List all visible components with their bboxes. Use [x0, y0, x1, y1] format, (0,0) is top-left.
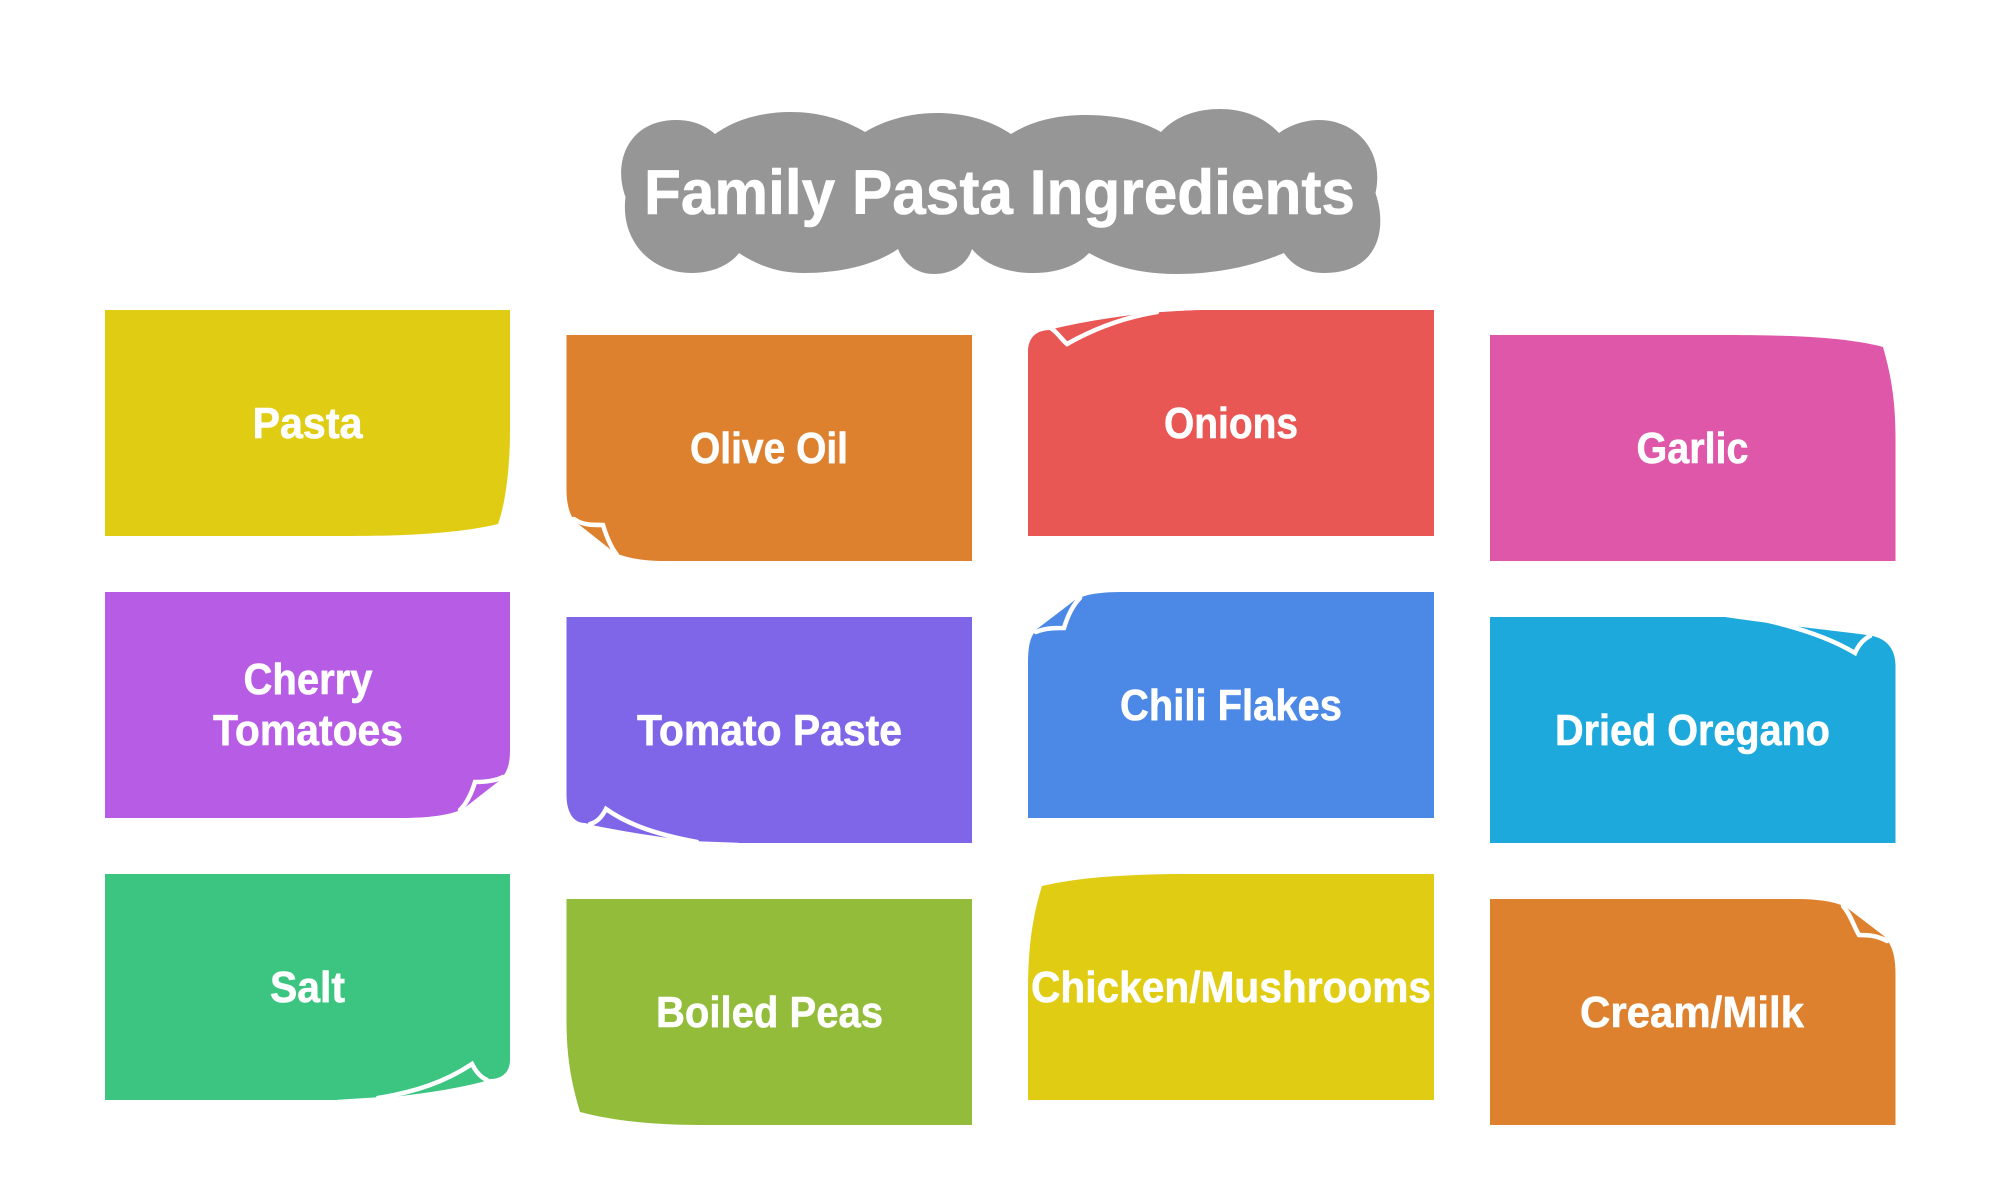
card: Cherry Tomatoes [105, 592, 510, 818]
title cloud banner: Family Pasta Ingredients [644, 158, 1355, 228]
card: Garlic: Garlic [1636, 424, 1748, 473]
card: Dried Oregano [1490, 616, 1896, 843]
card: Onions [1028, 308, 1434, 536]
card: Cream/Milk: Cream/Milk [1580, 988, 1804, 1037]
card: Onions: Onions [1164, 399, 1298, 448]
card: Chicken/Mushrooms [1028, 874, 1434, 1100]
card: Tomato Paste [566, 617, 972, 844]
card: Pasta: Pasta [252, 399, 363, 448]
card: Chili Flakes: Chili Flakes [1120, 681, 1342, 730]
card: Chili Flakes [1028, 592, 1434, 818]
card: Boiled Peas: Boiled Peas [656, 988, 883, 1037]
card: Cream/Milk [1490, 899, 1896, 1125]
card: Salt [105, 874, 510, 1101]
card: Tomato Paste: Tomato Paste [637, 706, 902, 755]
card: Olive Oil [566, 335, 972, 561]
card: Dried Oregano: Dried Oregano [1555, 706, 1830, 755]
title cloud banner [621, 109, 1380, 274]
card: Boiled Peas [566, 899, 972, 1125]
card: Cherry Tomatoes: Cherry [244, 655, 373, 704]
card: Salt: Salt [270, 963, 345, 1012]
card: Chicken/Mushrooms: Chicken/Mushrooms [1031, 963, 1431, 1012]
card: Cherry Tomatoes: Tomatoes [213, 706, 403, 755]
card: Garlic [1490, 335, 1896, 561]
card: Pasta [105, 310, 510, 536]
card: Olive Oil: Olive Oil [690, 424, 848, 473]
